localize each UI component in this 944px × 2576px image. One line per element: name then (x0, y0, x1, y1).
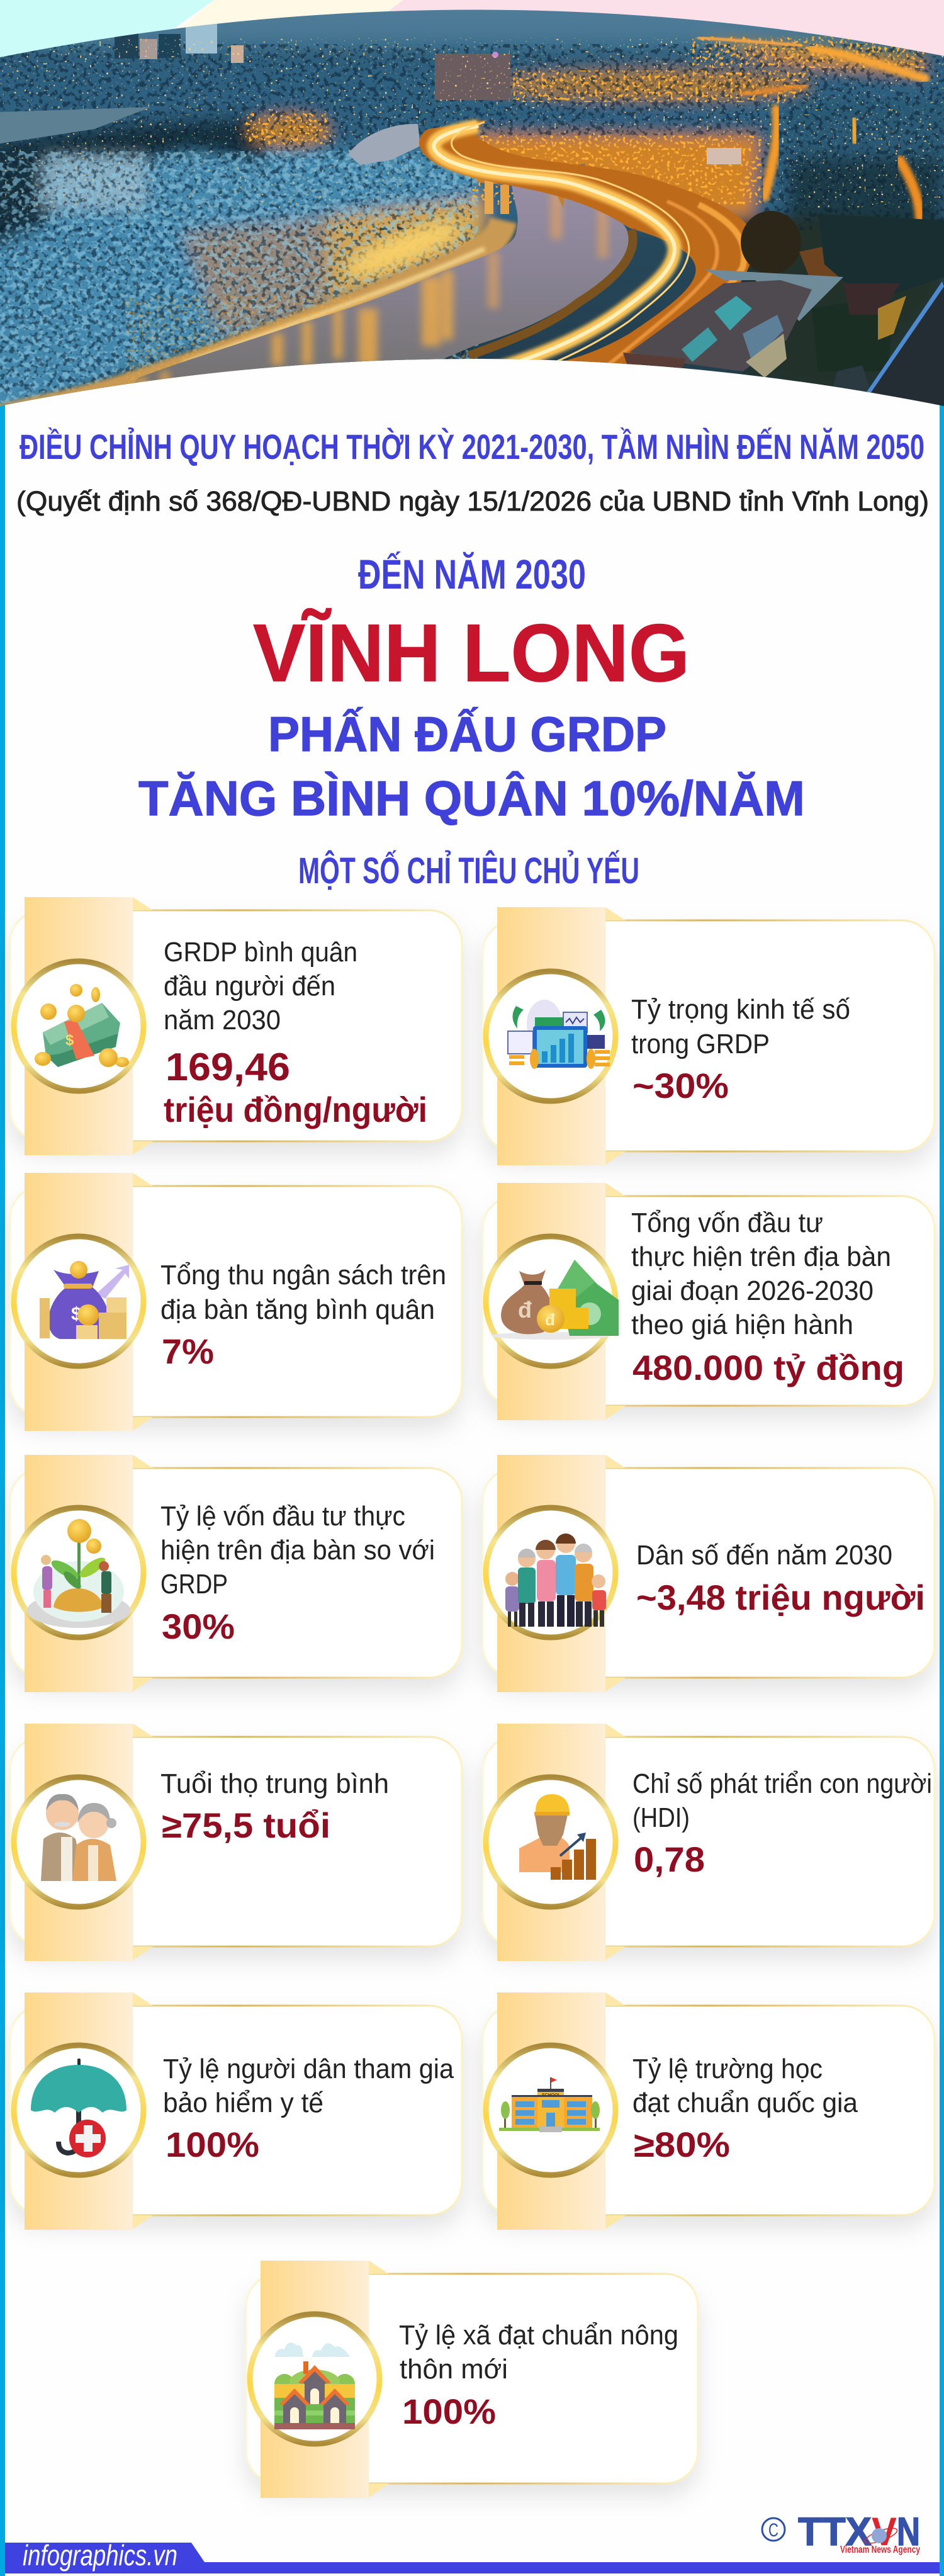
logo: copyright TTXVN: Vietnam News Agency (840, 2545, 920, 2555)
text: investment label: Tổng vốn đầu tư (631, 1207, 823, 1238)
panel: new rural communes (246, 2261, 698, 2498)
distant river (0, 107, 151, 144)
value: per capita: 169,46 (166, 1046, 290, 1089)
icon: family group (486, 1508, 615, 1637)
text: rural communes label (399, 2320, 678, 2385)
panel: investment ratio (10, 1455, 462, 1692)
text: investment ratio label: GRDP (160, 1569, 228, 1600)
text: budget label: Tổng thu ngân sách trên (160, 1260, 446, 1291)
value: digital economy: ~30% (632, 1066, 729, 1105)
icon: money and coins: $ (65, 1032, 74, 1049)
panel: total investment (483, 1183, 935, 1420)
panel: human development index (483, 1724, 935, 1961)
icon: money sack and bills: đ (518, 1297, 532, 1323)
header background shapes (0, 0, 944, 82)
text: budget label: địa bàn tăng bình quân (160, 1294, 435, 1325)
text: per capita label (164, 937, 357, 1036)
main title: GRDP target line 1: PHẤN ĐẤU GRDP (268, 706, 666, 762)
main river (135, 186, 629, 383)
value: population: ~3,48 triệu người (636, 1578, 925, 1617)
value: school: ≥80% (634, 2125, 730, 2164)
text: per capita label: năm 2030 (164, 1005, 281, 1036)
logo: copyright TTXVN: N (897, 2510, 920, 2554)
icon: money plant and people (14, 1508, 143, 1637)
text: population label: Dân số đến năm 2030 (636, 1540, 892, 1571)
text: per capita label: GRDP bình quân (164, 937, 357, 968)
text: investment label: theo giá hiện hành (631, 1309, 853, 1340)
text: HDI label: (HDI) (632, 1802, 690, 1833)
hero photo: city at night with river and highway (0, 0, 944, 428)
pale wall panel (707, 148, 741, 164)
text: insurance label: Tỷ lệ người dân tham gia (163, 2053, 454, 2084)
main title: Vinh Long: VĨNH LONG (253, 607, 690, 699)
value: budget: 7% (162, 1331, 214, 1371)
panel: health insurance (10, 1992, 462, 2230)
streets with light (699, 38, 925, 217)
icon: rural houses (250, 2314, 379, 2444)
highway (419, 120, 755, 384)
icon: money and coins (14, 961, 143, 1091)
bridge and pillars (472, 167, 585, 214)
city lights (0, 38, 944, 145)
text: HDI label (632, 1768, 932, 1833)
text: budget label (160, 1260, 446, 1325)
footer bar with site name: infographics.vn (23, 2539, 177, 2572)
main title: GRDP target line 2: TĂNG BÌNH QUÂN 10%/NĂM (138, 771, 805, 826)
large tonal areas (0, 38, 944, 422)
warm left bank buildings and promenade (0, 220, 503, 419)
logo: copyright TTXVN: V (872, 2510, 897, 2554)
text: investment label: giai đoạn 2026-2030 (631, 1275, 874, 1306)
text: investment ratio label (160, 1501, 435, 1600)
text: school label: đạt chuẩn quốc gia (632, 2087, 858, 2118)
icon: elderly couple (14, 1777, 143, 1907)
text: rural communes label: Tỷ lệ xã đạt chuẩn nông (399, 2320, 678, 2351)
value: per capita (164, 1046, 427, 1129)
panel: digital economy share (483, 907, 935, 1165)
upper river (348, 124, 420, 165)
text: school label: Tỷ lệ trường học (632, 2053, 823, 2084)
text: life expectancy label: Tuổi thọ trung bình (160, 1768, 389, 1799)
text: school label (632, 2053, 858, 2118)
icon: purple money bag (14, 1236, 143, 1366)
subheading: decision reference: (Quyết định số 368/QĐ-UBND ngày 15/1/2026 của UBND tỉnh Vĩnh Long) (16, 486, 929, 517)
value: investment ratio: 30% (162, 1607, 235, 1646)
footer bar with site name (5, 2539, 940, 2573)
text: digital economy label: Tỷ trọng kinh tế số (631, 994, 850, 1025)
trees and foreground buildings (623, 211, 944, 406)
value: life expectancy: ≥75,5 tuổi (162, 1805, 330, 1845)
icon: money sack and bills: đ (545, 1310, 555, 1329)
text: insurance label: bảo hiểm y tế (163, 2087, 323, 2118)
icon: digital tablet and charts (486, 971, 615, 1101)
towers (115, 21, 510, 100)
logo: copyright TTXVN (762, 2510, 920, 2555)
value: per capita: triệu đồng/người (164, 1090, 427, 1129)
icon: purple money bag: $ (71, 1304, 82, 1325)
text: investment label: thực hiện trên địa bàn (631, 1241, 891, 1272)
panel: national standard schools (483, 1992, 935, 2230)
icon: worker with chart (486, 1777, 615, 1907)
panel: population (483, 1455, 935, 1692)
value: HDI: 0,78 (634, 1839, 705, 1879)
panel: budget revenue (10, 1173, 462, 1431)
value: rural communes: 100% (402, 2392, 496, 2431)
building texture (0, 44, 944, 135)
icon: money sack and bills (486, 1236, 619, 1366)
text: investment label (631, 1207, 891, 1340)
panel: GRDP per capita (10, 897, 462, 1155)
text: insurance label (163, 2053, 454, 2118)
logo: copyright TTXVN: C (768, 2520, 778, 2541)
icon: umbrella with medical cross (14, 2045, 143, 2175)
text: digital economy label (631, 994, 850, 1059)
text: investment ratio label: hiện trên địa bàn so với (160, 1535, 435, 1566)
value: insurance: 100% (166, 2125, 259, 2164)
text: investment ratio label: Tỷ lệ vốn đầu tư thực (160, 1501, 405, 1532)
icon: school building (486, 2045, 615, 2175)
value: investment: 480.000 tỷ đồng (632, 1348, 904, 1387)
text: per capita label: đầu người đến (164, 971, 335, 1002)
heading: by 2030: ĐẾN NĂM 2030 (358, 551, 586, 597)
icon: school building: SCHOOL (542, 2093, 561, 2098)
section heading: key indicators: MỘT SỐ CHỈ TIÊU CHỦ YẾU (298, 850, 639, 891)
text: rural communes label: thôn mới (400, 2354, 508, 2385)
panel: life expectancy (10, 1724, 462, 1961)
logo: copyright TTXVN: TTX (798, 2510, 872, 2554)
text: digital economy label: trong GRDP (631, 1029, 770, 1059)
